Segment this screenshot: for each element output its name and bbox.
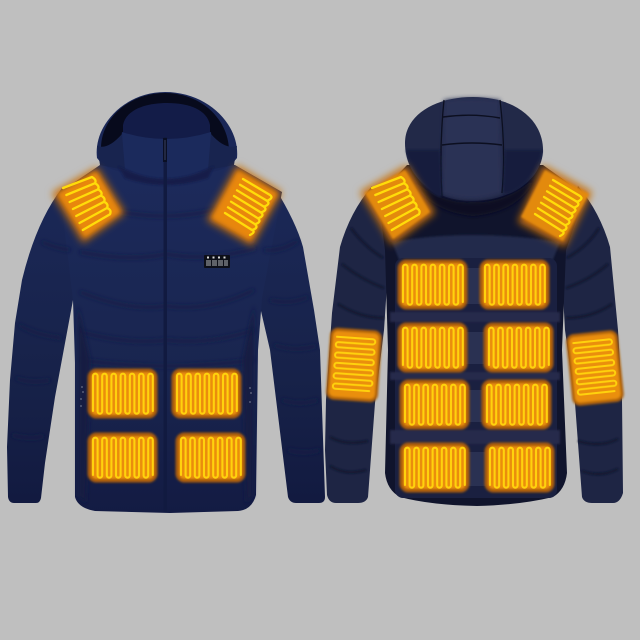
pocket zipper marks	[80, 386, 252, 407]
body side shading	[78, 305, 254, 503]
pad 3	[88, 432, 158, 482]
back jacket	[325, 97, 623, 506]
back left shoulder pad	[360, 165, 435, 245]
sleeve quilting	[330, 228, 618, 474]
hood back	[405, 97, 543, 216]
front right sleeve	[240, 188, 325, 503]
heating zones: front lower pads	[88, 368, 246, 482]
back pad row 3 left	[400, 380, 470, 430]
heating zones: back pads	[398, 260, 554, 492]
quilting shadows	[12, 210, 320, 452]
pad 2	[172, 368, 242, 418]
back pad row 2 left	[398, 322, 468, 372]
back pad row 1 left	[398, 260, 468, 310]
back pad row 3 right	[482, 380, 552, 430]
left arm pad	[326, 327, 382, 403]
control panel badge	[204, 255, 230, 268]
back pad row 2 right	[484, 322, 554, 372]
back right shoulder pad	[518, 165, 592, 247]
back body	[378, 165, 585, 506]
pad 1	[88, 368, 158, 418]
zipper	[163, 137, 167, 512]
right arm pad	[565, 329, 625, 407]
back pad row 1 right	[480, 260, 550, 310]
front left sleeve	[7, 188, 95, 503]
back pad row 4 left	[400, 442, 470, 492]
front body	[60, 165, 282, 513]
heating zones: front shoulders	[52, 165, 282, 246]
front left shoulder pad	[52, 167, 125, 243]
front jacket	[7, 92, 325, 513]
back left sleeve	[325, 186, 390, 503]
pad 4	[176, 432, 246, 482]
heating zones: back shoulders	[360, 165, 592, 247]
hood	[97, 92, 237, 185]
heating zones: arms	[326, 327, 625, 407]
back pad row 4 right	[484, 442, 554, 492]
back center panel	[390, 235, 560, 498]
back right sleeve	[560, 186, 623, 503]
front right shoulder pad	[207, 165, 282, 246]
